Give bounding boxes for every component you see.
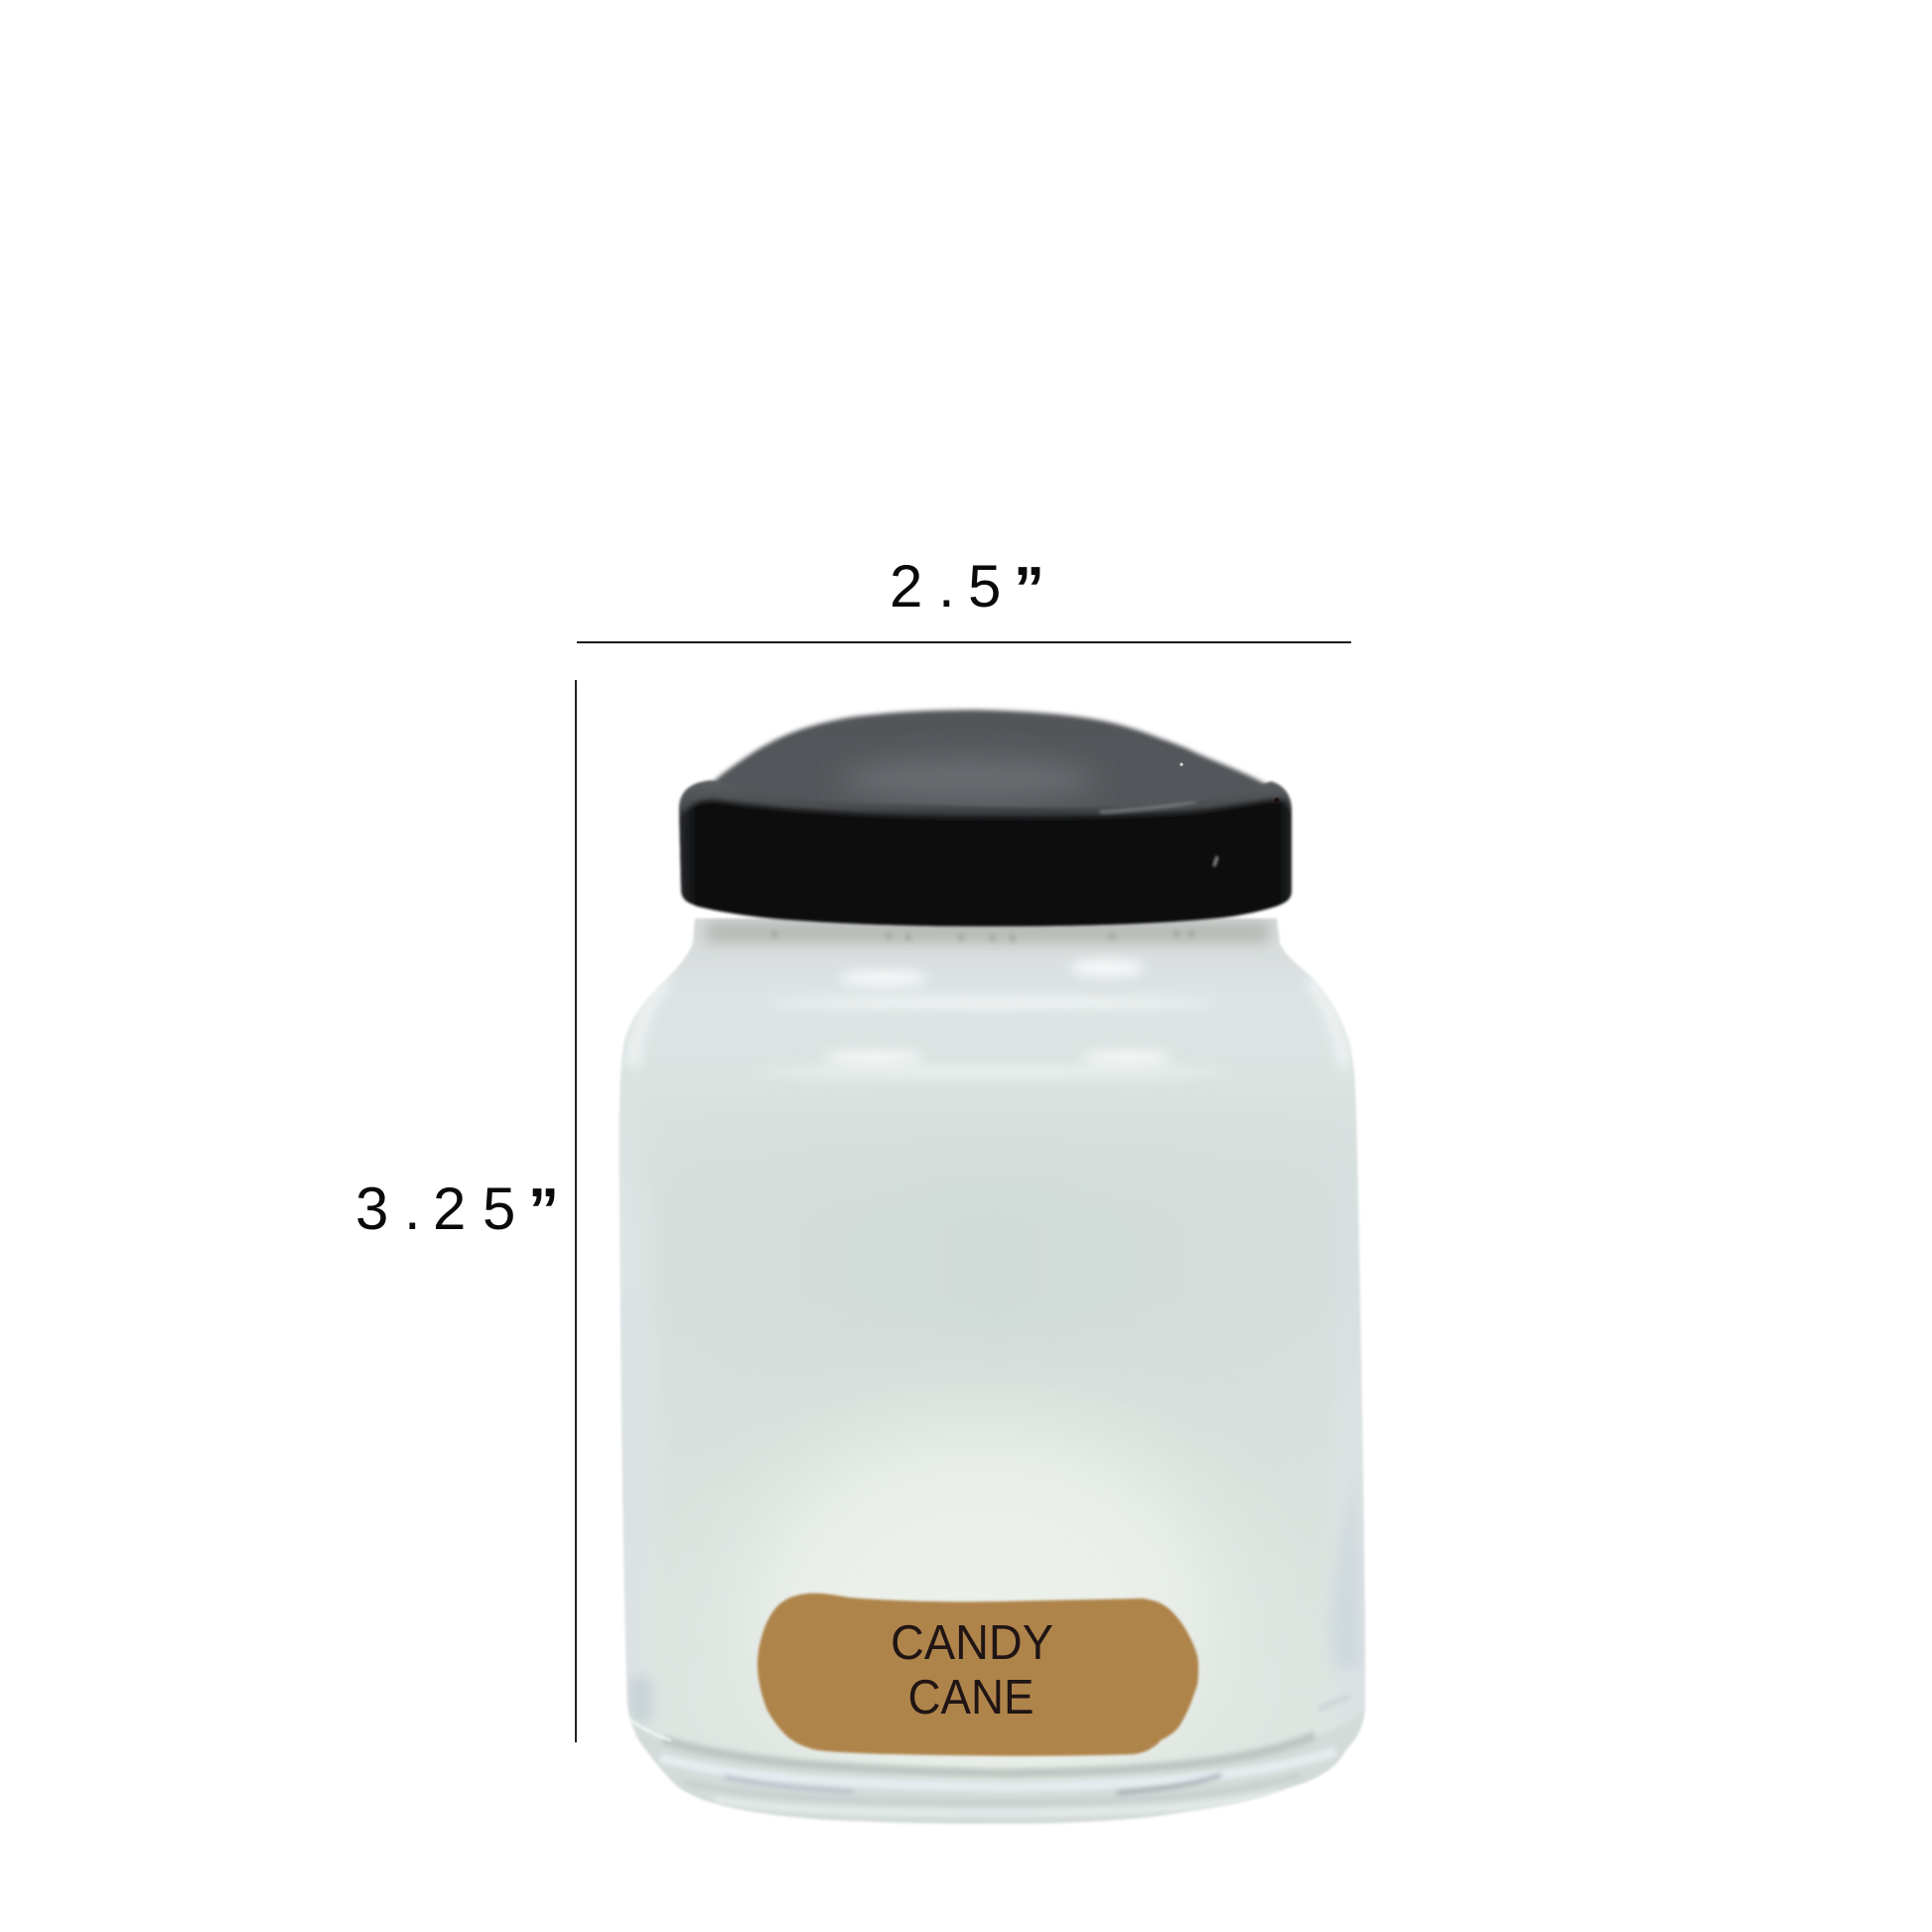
width dimension line <box>577 641 1351 643</box>
infographic: jar with dimensions <box>357 565 1366 1825</box>
label text: candy cane: CANE <box>907 1671 1035 1725</box>
jar body <box>618 917 1366 1825</box>
height label: 5 <box>483 1175 515 1242</box>
left side clear glass <box>620 1291 643 1708</box>
height dimension line <box>575 680 577 1742</box>
lid band highlight <box>1100 801 1196 812</box>
shoulder reflection <box>633 978 667 1067</box>
height label: 3 <box>355 1175 388 1242</box>
lid band <box>675 780 1301 938</box>
candle jar <box>596 710 1390 1847</box>
height label: . <box>404 1175 421 1242</box>
base glass <box>637 1714 1363 1823</box>
jar lid <box>675 710 1301 938</box>
height label <box>355 1175 559 1245</box>
brighter wax centre <box>745 1420 1221 1797</box>
label sticker <box>758 1593 1198 1756</box>
lid dome sheen <box>839 758 1097 801</box>
width label <box>890 553 1044 623</box>
neck dust <box>772 931 1193 941</box>
width label: 5 <box>968 553 1001 620</box>
width label: 2 <box>890 553 922 620</box>
label text: candy cane <box>891 1616 1053 1725</box>
height label: ” <box>528 1176 559 1245</box>
neck shadow <box>707 921 1268 943</box>
height label: 2 <box>433 1175 466 1242</box>
shoulder highlights <box>801 956 1183 1077</box>
width label: . <box>938 553 955 620</box>
lid specks <box>1179 762 1279 802</box>
label text: candy cane: CANDY <box>891 1616 1053 1670</box>
right side clear glass <box>1335 1291 1370 1727</box>
lid dome <box>703 710 1279 819</box>
width label: ” <box>1014 555 1044 623</box>
